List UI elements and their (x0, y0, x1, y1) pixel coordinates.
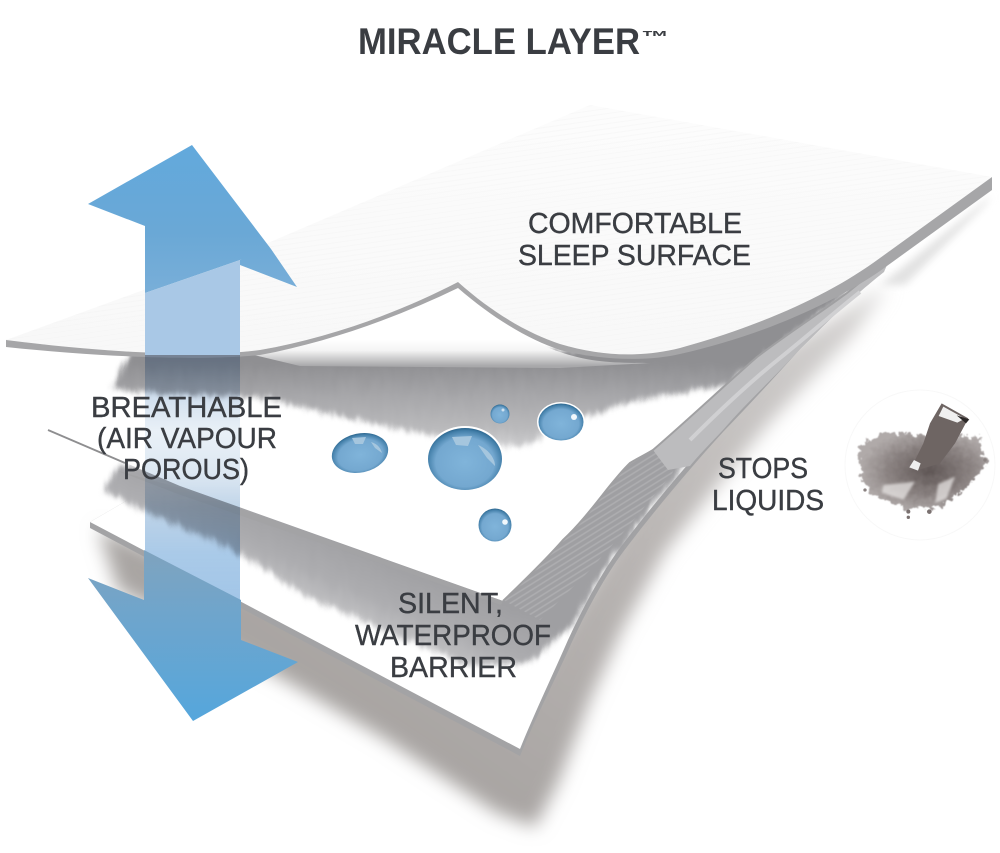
label: stops liquids: LIQUIDS (712, 485, 824, 517)
label: stops liquids (712, 453, 824, 517)
label: silent waterproof barrier: WATERPROOF (355, 620, 551, 652)
panel: comfortable sleep surface top sheet (6, 105, 992, 368)
arrow head: down (88, 550, 298, 721)
arrow: breathable up and down airflow (88, 145, 298, 721)
icon: water drop bottom (478, 508, 512, 542)
label: breathable: POROUS) (123, 454, 249, 486)
panel: sheet edge band (503, 258, 890, 601)
label: comfortable sleep surface: SLEEP SURFACE (518, 240, 751, 272)
arrow shaft (145, 260, 240, 603)
label: breathable (91, 392, 282, 486)
cast shadow on bottom sheet (104, 420, 692, 664)
icon: liquid stain with spill (845, 390, 995, 540)
label: breathable: (AIR VAPOUR (97, 423, 277, 455)
icon: water drop left (326, 426, 394, 480)
panel: middle sheet with liquids beading (48, 258, 890, 605)
arrow head: up (88, 145, 297, 293)
title: MIRACLE LAYER (358, 21, 640, 62)
icon: water drop right (537, 402, 585, 442)
label: silent waterproof barrier: SILENT, (398, 588, 503, 620)
label: comfortable sleep surface: COMFORTABLE (528, 208, 742, 240)
label: silent waterproof barrier: BARRIER (390, 652, 517, 684)
icon: water drop small top (490, 404, 510, 424)
shadow cast by top sheet (112, 292, 850, 447)
label: silent waterproof barrier (355, 588, 551, 684)
icon: water drop large (426, 426, 504, 492)
label: breathable: BREATHABLE (91, 392, 282, 424)
panel: silent waterproof barrier bottom sheet (90, 260, 882, 756)
title: ™ (641, 29, 669, 46)
label: comfortable sleep surface (518, 208, 751, 272)
outer shadow beneath the sheets (98, 195, 992, 827)
label: stops liquids: STOPS (718, 453, 808, 485)
